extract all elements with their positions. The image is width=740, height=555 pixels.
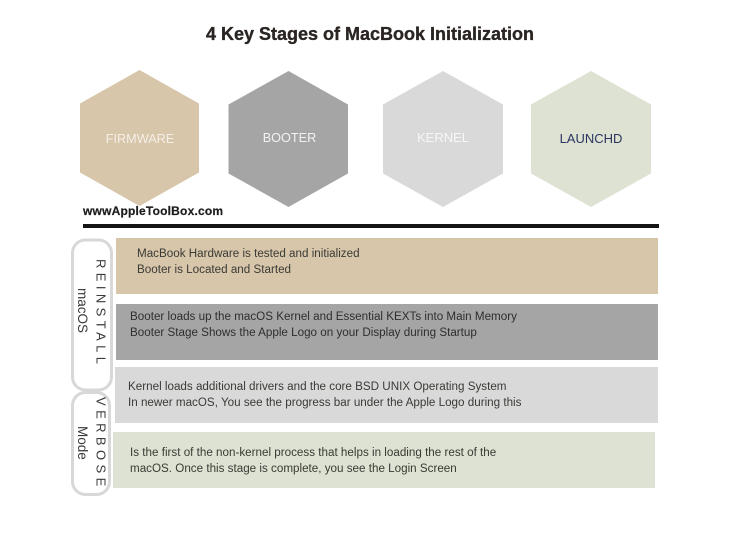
panel: kernel description (115, 367, 658, 423)
panel: kernel description: Kernel loads additional drivers and the core BSD UNIX Operating System (128, 380, 507, 393)
panel: launchd description: Is the first of the non-kernel process that helps in loading the rest of the (130, 446, 496, 459)
bracket: reinstall macOS: macOS (75, 288, 90, 333)
website credit: wwwAppleToolBox.com (83, 204, 223, 218)
hexagon: launchd: LAUNCHD (560, 131, 622, 146)
bracket: verbose mode: Mode (75, 426, 90, 460)
hexagon: booter (228, 71, 348, 207)
divider rule (83, 224, 659, 228)
title: 4 Key Stages of MacBook Initialization (206, 24, 534, 44)
panel: firmware description: MacBook Hardware is tested and initialized (137, 247, 360, 260)
panel: booter description (116, 304, 658, 360)
bracket: reinstall macOS: REINSTALL (94, 259, 108, 368)
panel: firmware description: Booter is Located and Started (137, 263, 291, 276)
bracket: verbose mode: VERBOSE (94, 397, 108, 491)
panel: booter description: Booter Stage Shows the Apple Logo on your Display during Startup (130, 326, 477, 339)
panel: launchd description (113, 432, 655, 488)
bracket: verbose mode (72, 392, 110, 494)
panel: kernel description: In newer macOS, You see the progress bar under the Apple Logo during this (128, 396, 521, 409)
panel: booter description: Booter loads up the macOS Kernel and Essential KEXTs into Main Memory (130, 310, 517, 323)
panel: launchd description: macOS. Once this stage is complete, you see the Login Screen (130, 462, 457, 475)
hexagon: kernel (383, 71, 503, 207)
panel: firmware description (116, 238, 658, 294)
bracket: reinstall macOS (72, 240, 112, 390)
hexagon: firmware: FIRMWARE (106, 132, 174, 146)
hexagon: kernel: KERNEL (417, 130, 469, 145)
hexagon: booter: BOOTER (263, 131, 316, 145)
hexagon: firmware (80, 70, 199, 206)
hexagon: launchd (531, 71, 651, 207)
